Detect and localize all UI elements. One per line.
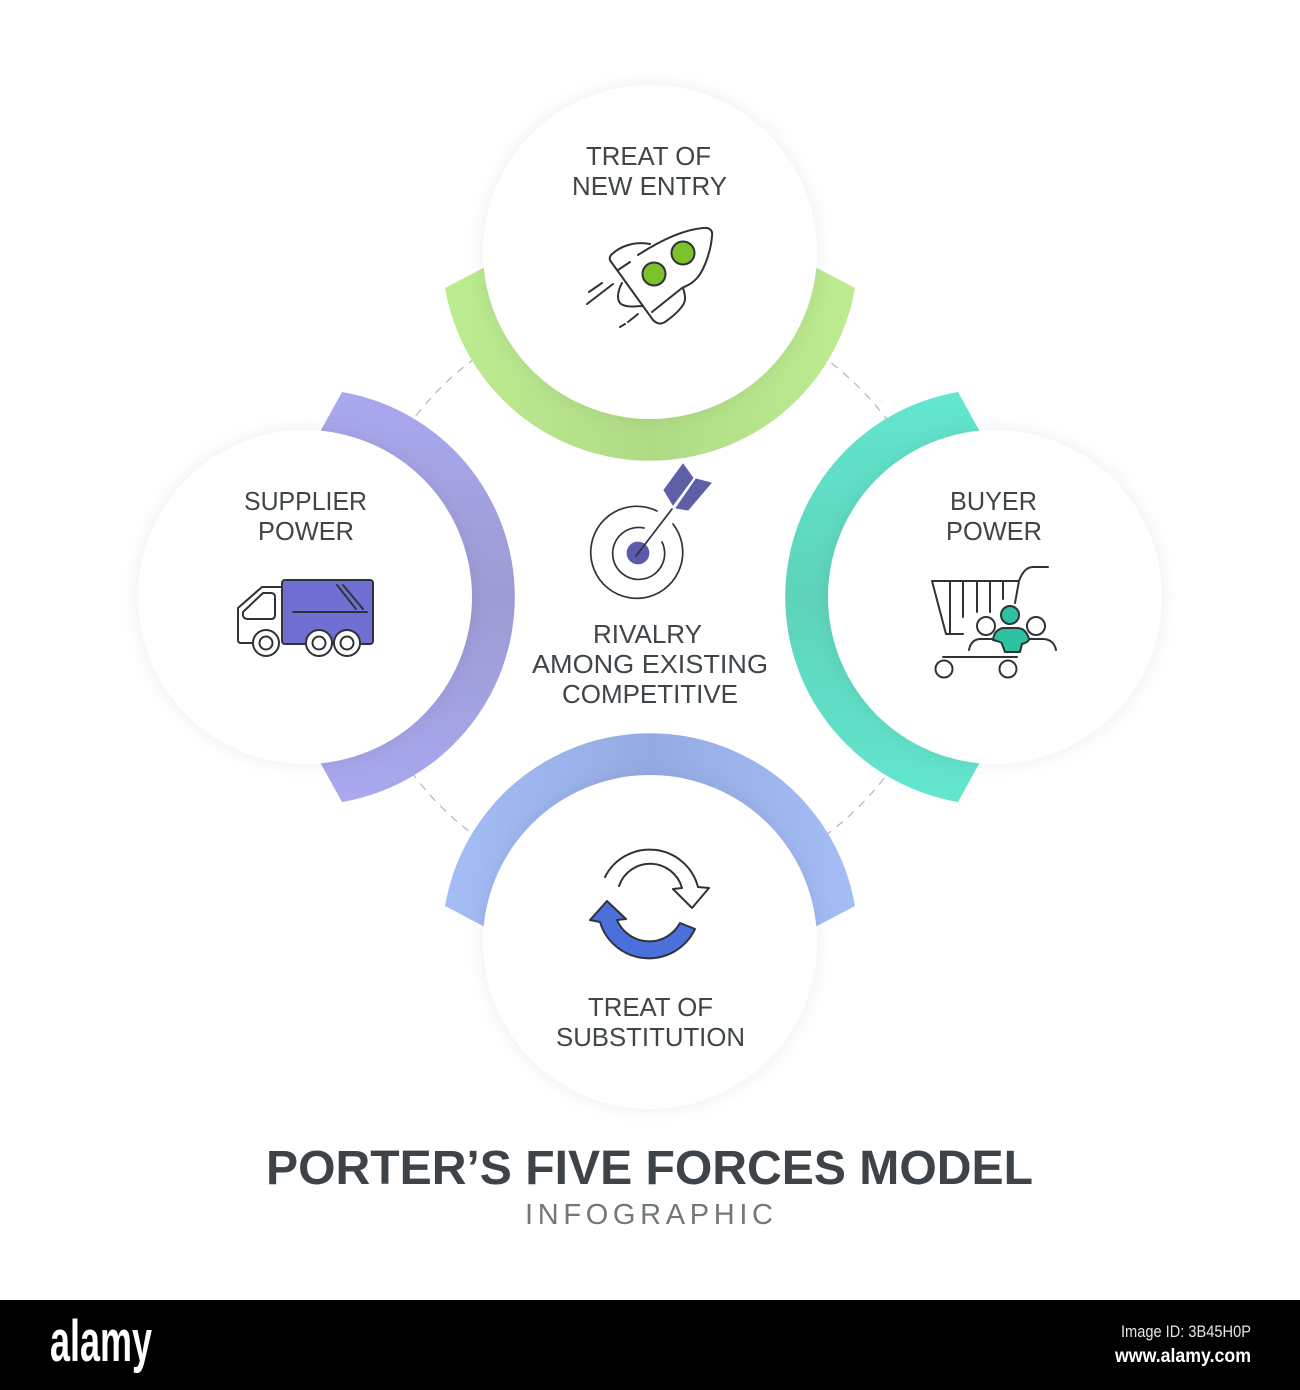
heading: supplier power: POWER: [258, 516, 354, 546]
panel: treat of new entry: [445, 85, 855, 461]
panel: treat of substitution: [445, 733, 855, 1109]
heading: buyer power: POWER: [946, 516, 1042, 546]
panel: buyer power: [785, 392, 1162, 802]
panel: supplier power: [138, 392, 515, 802]
purple arc: [305, 392, 515, 802]
white circle: [828, 430, 1162, 764]
heading: treat of new entry: [572, 141, 727, 201]
icon: shopping cart with buyers: [932, 567, 1056, 678]
heading: supplier power: SUPPLIER: [244, 486, 367, 516]
white circle: [483, 85, 817, 419]
heading: rivalry among existing competitive: AMONG EXISTING: [532, 649, 768, 679]
image id: Image ID: 3B45H0P: [1121, 1322, 1251, 1341]
footer bar: [0, 1300, 1300, 1390]
white circle: [483, 775, 817, 1109]
subtitle: INFOGRAPHIC: [525, 1199, 773, 1231]
panel: rivalry among existing competitive: [532, 464, 768, 709]
blue arc: [445, 733, 855, 942]
heading: treat of new entry: NEW ENTRY: [572, 171, 727, 201]
icon: target with dart: [591, 464, 711, 598]
footer logo: alamy: [50, 1309, 152, 1374]
icon: rocket: [587, 228, 712, 327]
heading: treat of substitution: TREAT OF: [588, 992, 713, 1022]
website: www.alamy.com: [1114, 1346, 1251, 1367]
heading: buyer power: [946, 486, 1042, 546]
heading: treat of new entry: TREAT OF: [586, 141, 711, 171]
heading: treat of substitution: [556, 992, 745, 1052]
heading: supplier power: [244, 486, 367, 546]
dashed connector ring: [354, 301, 946, 893]
heading: treat of substitution: SUBSTITUTION: [556, 1022, 745, 1052]
icon: truck: [238, 580, 373, 656]
heading: rivalry among existing competitive: COMPETITIVE: [562, 679, 738, 709]
title: PORTER’S FIVE FORCES MODEL: [266, 1142, 1033, 1195]
heading: rivalry among existing competitive: [532, 619, 768, 709]
heading: buyer power: BUYER: [950, 486, 1037, 516]
icon: cycle arrows: [590, 850, 709, 958]
green arc: [445, 252, 855, 461]
teal arc: [785, 392, 995, 802]
heading: rivalry among existing competitive: RIVALRY: [593, 619, 702, 649]
white circle: [138, 430, 472, 764]
